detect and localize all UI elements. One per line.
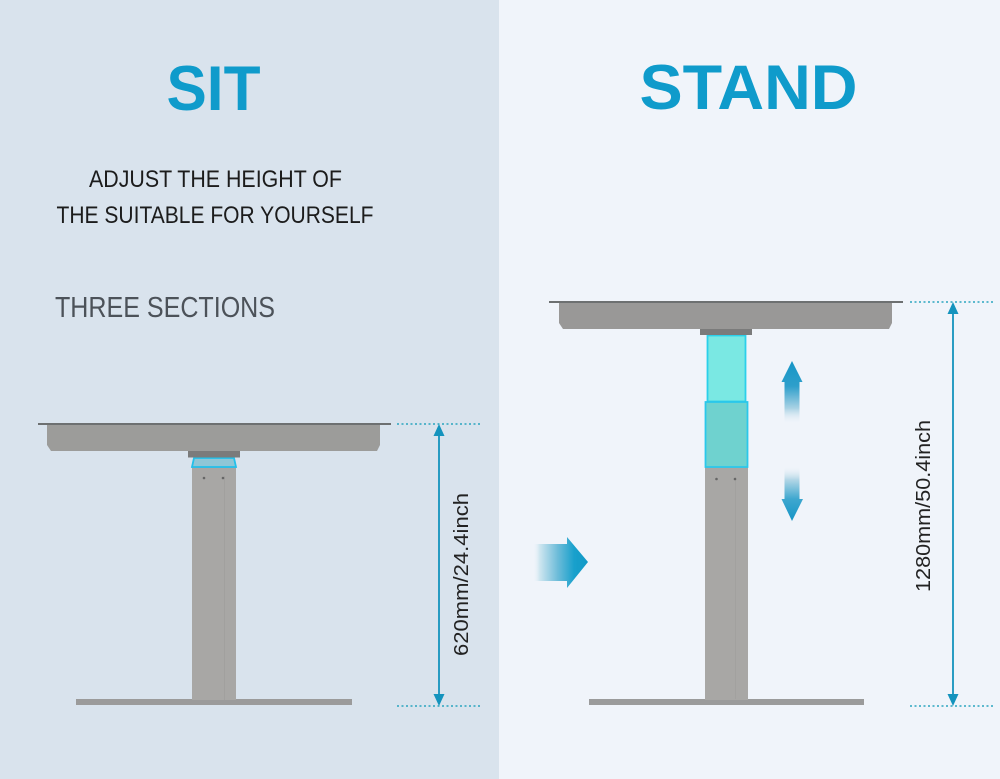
label: 620mm/24.4inch <box>450 493 473 656</box>
text block: adjust the height: THE SUITABLE FOR YOURSELF <box>56 202 374 229</box>
panel: sit background <box>0 0 499 779</box>
base <box>589 699 864 705</box>
arrow: sit to stand <box>533 537 588 588</box>
dimension: sit height <box>397 424 482 706</box>
text block: adjust the height: ADJUST THE HEIGHT OF <box>89 166 342 193</box>
arrow: down <box>782 466 803 521</box>
text block: adjust the height <box>56 166 374 229</box>
leg <box>705 467 748 700</box>
arrow: up <box>782 361 802 424</box>
desk: stand position <box>549 301 903 705</box>
lower cyan section <box>706 402 748 467</box>
heading: STAND: STAND <box>640 53 858 123</box>
mount <box>188 451 240 458</box>
desk: sit position <box>38 423 391 705</box>
base <box>76 699 352 705</box>
tabletop <box>47 425 380 451</box>
label: 1280mm/50.4inch <box>912 420 935 592</box>
tabletop <box>559 303 892 329</box>
text block: three sections: THREE SECTIONS <box>55 292 275 324</box>
cyan section <box>192 458 236 467</box>
mount <box>700 329 752 335</box>
upper cyan section <box>708 336 746 402</box>
dimension: stand height <box>910 302 994 706</box>
leg <box>192 466 236 700</box>
panel: stand background <box>499 0 1000 779</box>
heading: SIT: SIT <box>166 54 260 124</box>
